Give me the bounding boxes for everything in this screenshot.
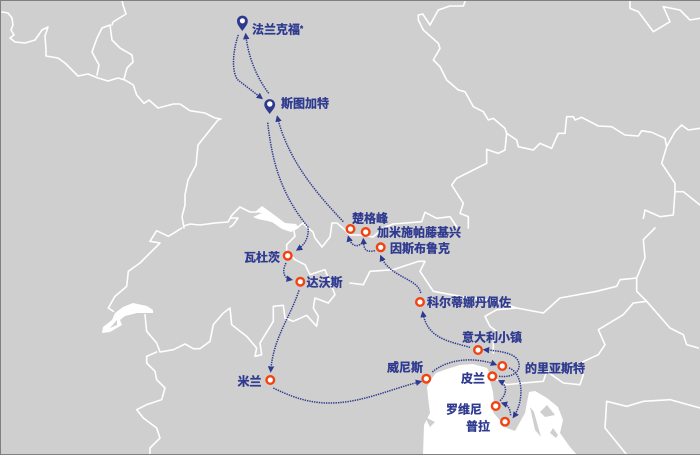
stop: Vaduz: 瓦杜茨 [244, 250, 280, 264]
stop: Milan: 米兰 [238, 374, 262, 388]
route arrows [233, 34, 521, 417]
stop: Pula [466, 418, 509, 434]
label: Frankfurt: 法兰克福 [252, 22, 300, 36]
stop: Pula: 普拉 [466, 418, 490, 434]
stop: Innsbruck: 因斯布鲁克 [390, 240, 450, 256]
stop: Zugspitze [347, 210, 388, 233]
stop: Trieste: 的里亚斯特 [525, 360, 585, 376]
stop: Milan [238, 374, 274, 388]
label: Stuttgart: 斯图加特 [281, 96, 329, 110]
stop: Garmisch-Partenkirchen: 加米施帕藤基兴 [377, 224, 461, 240]
stop: Zugspitze: 楚格峰 [352, 210, 388, 226]
stop: Piran: 皮兰 [461, 370, 485, 386]
stop: Cortina d'Ampezzo: 科尔蒂娜丹佩佐 [427, 294, 511, 310]
stop: Piran [461, 370, 496, 386]
stop: Venice [387, 360, 430, 383]
pin: Stuttgart [264, 99, 275, 114]
stop: Davos: 达沃斯 [306, 274, 343, 290]
stop: Italian small town: 意大利小镇 [462, 330, 522, 344]
label: Frankfurt: * [300, 24, 304, 34]
pin: Frankfurt [237, 16, 248, 31]
stop: Rovinj [446, 402, 500, 416]
stop: Rovinj: 罗维尼 [446, 402, 482, 416]
stop: Venice: 威尼斯 [387, 360, 423, 374]
stop: Italian small town [462, 330, 522, 354]
stop: Trieste [498, 360, 585, 376]
